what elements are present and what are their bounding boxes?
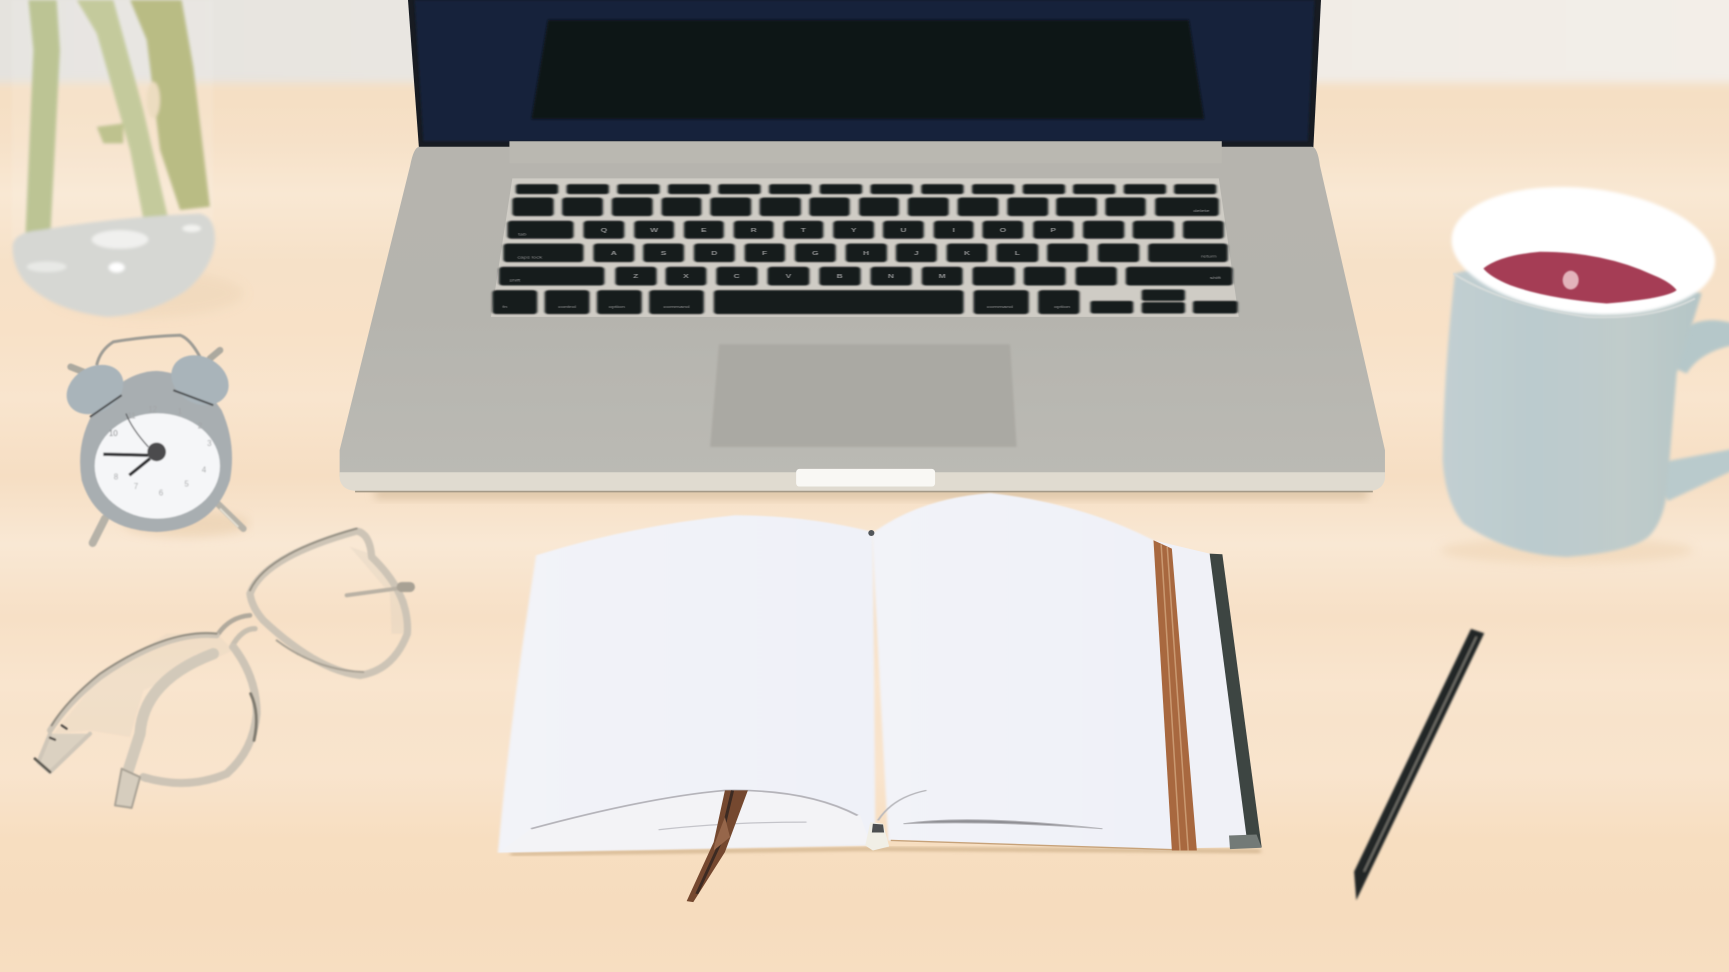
- key legends: control: [558, 305, 576, 310]
- keyboard reflection: [531, 20, 1204, 119]
- key legends: option: [609, 305, 625, 310]
- clock numerals: 6: [159, 489, 164, 498]
- key legends: command: [663, 305, 690, 310]
- key legends: H: [863, 249, 869, 256]
- glass body: [12, 0, 213, 240]
- key legends: A: [611, 249, 617, 256]
- rim lower edge: [1453, 273, 1695, 317]
- keys: [492, 184, 1238, 314]
- key legends: I: [952, 226, 955, 233]
- far temple arm: [347, 587, 408, 595]
- key legends: fn: [502, 305, 508, 310]
- cover corner: [1229, 834, 1262, 849]
- key legends: [502, 209, 1221, 310]
- clock numerals: [109, 405, 212, 498]
- key legends: shift: [1210, 276, 1221, 281]
- upper lens: [250, 531, 407, 675]
- key legends: F: [762, 249, 768, 256]
- key legends: M: [939, 273, 946, 280]
- key legends: B: [837, 273, 843, 280]
- mug shadow: [1440, 537, 1693, 564]
- notebook cover: [1210, 554, 1262, 849]
- key legends: X: [683, 273, 689, 280]
- key legends: command: [987, 305, 1013, 310]
- page arch right: [878, 790, 926, 820]
- clock numerals: 1: [178, 407, 183, 416]
- clock numerals: 11: [128, 412, 136, 421]
- key legends: D: [711, 249, 717, 256]
- key legends: V: [786, 273, 792, 280]
- hinge: [509, 141, 1222, 163]
- clock face: [95, 413, 220, 519]
- glass vase with stems: [12, 0, 243, 317]
- front lip: [340, 472, 1385, 491]
- lip shadow line: [355, 491, 1373, 493]
- alarm clock: [58, 335, 250, 543]
- translucent temple arm band: [53, 634, 233, 737]
- trackpad: [710, 344, 1017, 447]
- keyboard well: [491, 178, 1239, 317]
- mug of tea: [1440, 175, 1729, 564]
- key legends: R: [751, 226, 758, 233]
- clock numerals: 4: [202, 465, 207, 474]
- key legends: delete: [1193, 209, 1210, 213]
- vase shadow: [50, 270, 243, 317]
- clock legs: [93, 519, 105, 543]
- tea: [1483, 252, 1677, 303]
- laptop base: [340, 147, 1385, 477]
- mug body: [1443, 243, 1702, 557]
- key legends: J: [914, 249, 919, 256]
- key legends: caps lock: [517, 255, 543, 260]
- key legends: tab: [518, 232, 527, 237]
- clock shadow: [123, 510, 250, 537]
- clock bells: [58, 355, 132, 424]
- top spine mark: [868, 530, 874, 536]
- key legends: Q: [601, 226, 608, 233]
- clock numerals: 12: [148, 405, 158, 414]
- near temple arms: [125, 654, 213, 780]
- lower page stack left: [499, 790, 870, 852]
- page arch shadow left: [531, 790, 858, 829]
- laptop screen: [415, 0, 1314, 141]
- spine clip: [865, 822, 889, 850]
- laptop shadow: [375, 489, 1367, 499]
- mug rim: [1445, 175, 1721, 327]
- pencil: [1354, 629, 1484, 900]
- key legends: C: [734, 273, 740, 280]
- key legends: L: [1015, 249, 1021, 256]
- key legends: U: [900, 226, 906, 233]
- left page block: [498, 515, 875, 853]
- stems: [130, 0, 210, 210]
- key legends: W: [650, 226, 658, 233]
- key legends: O: [1000, 226, 1007, 233]
- bridge: [218, 615, 250, 634]
- clock numerals: 8: [114, 473, 119, 482]
- key legends: E: [701, 226, 707, 233]
- elastic band: [1153, 540, 1197, 850]
- clock numerals: 10: [109, 429, 118, 438]
- clock hands: [103, 454, 148, 455]
- clock numerals: 2: [198, 422, 203, 431]
- key legends: T: [801, 226, 807, 233]
- clock numerals: 3: [207, 439, 212, 448]
- clock numerals: 5: [184, 479, 189, 488]
- ribbon bookmark: [687, 790, 748, 902]
- key legends: option: [1054, 305, 1070, 310]
- key legends: Z: [633, 273, 639, 280]
- temple tip: [115, 769, 140, 808]
- clock body: [80, 371, 232, 532]
- clock handle: [97, 335, 200, 365]
- key legends: Y: [851, 226, 857, 233]
- eyeglasses: [35, 529, 410, 808]
- key legends: P: [1050, 226, 1056, 233]
- key legends: N: [888, 273, 894, 280]
- tea reflection: [1563, 271, 1579, 289]
- laptop screen bezel: [408, 0, 1321, 149]
- open notebook: [498, 493, 1262, 902]
- mug handle: [1672, 320, 1729, 374]
- opening notch: [796, 469, 935, 487]
- key legends: G: [812, 249, 819, 256]
- glass base: [13, 213, 215, 317]
- notebook shadow: [511, 849, 1261, 854]
- page edge: [891, 840, 1176, 850]
- keyboard: [491, 178, 1239, 317]
- key legends: return: [1201, 254, 1217, 259]
- right page: [872, 493, 1176, 850]
- key legends: shift: [509, 278, 521, 283]
- clock numerals: 7: [134, 482, 139, 491]
- right page block: [1153, 540, 1248, 849]
- wall behind desk: [0, 0, 1729, 83]
- lower lens: [50, 635, 217, 730]
- key legends: K: [964, 249, 971, 256]
- key legends: S: [661, 249, 667, 256]
- laptop: [340, 0, 1385, 499]
